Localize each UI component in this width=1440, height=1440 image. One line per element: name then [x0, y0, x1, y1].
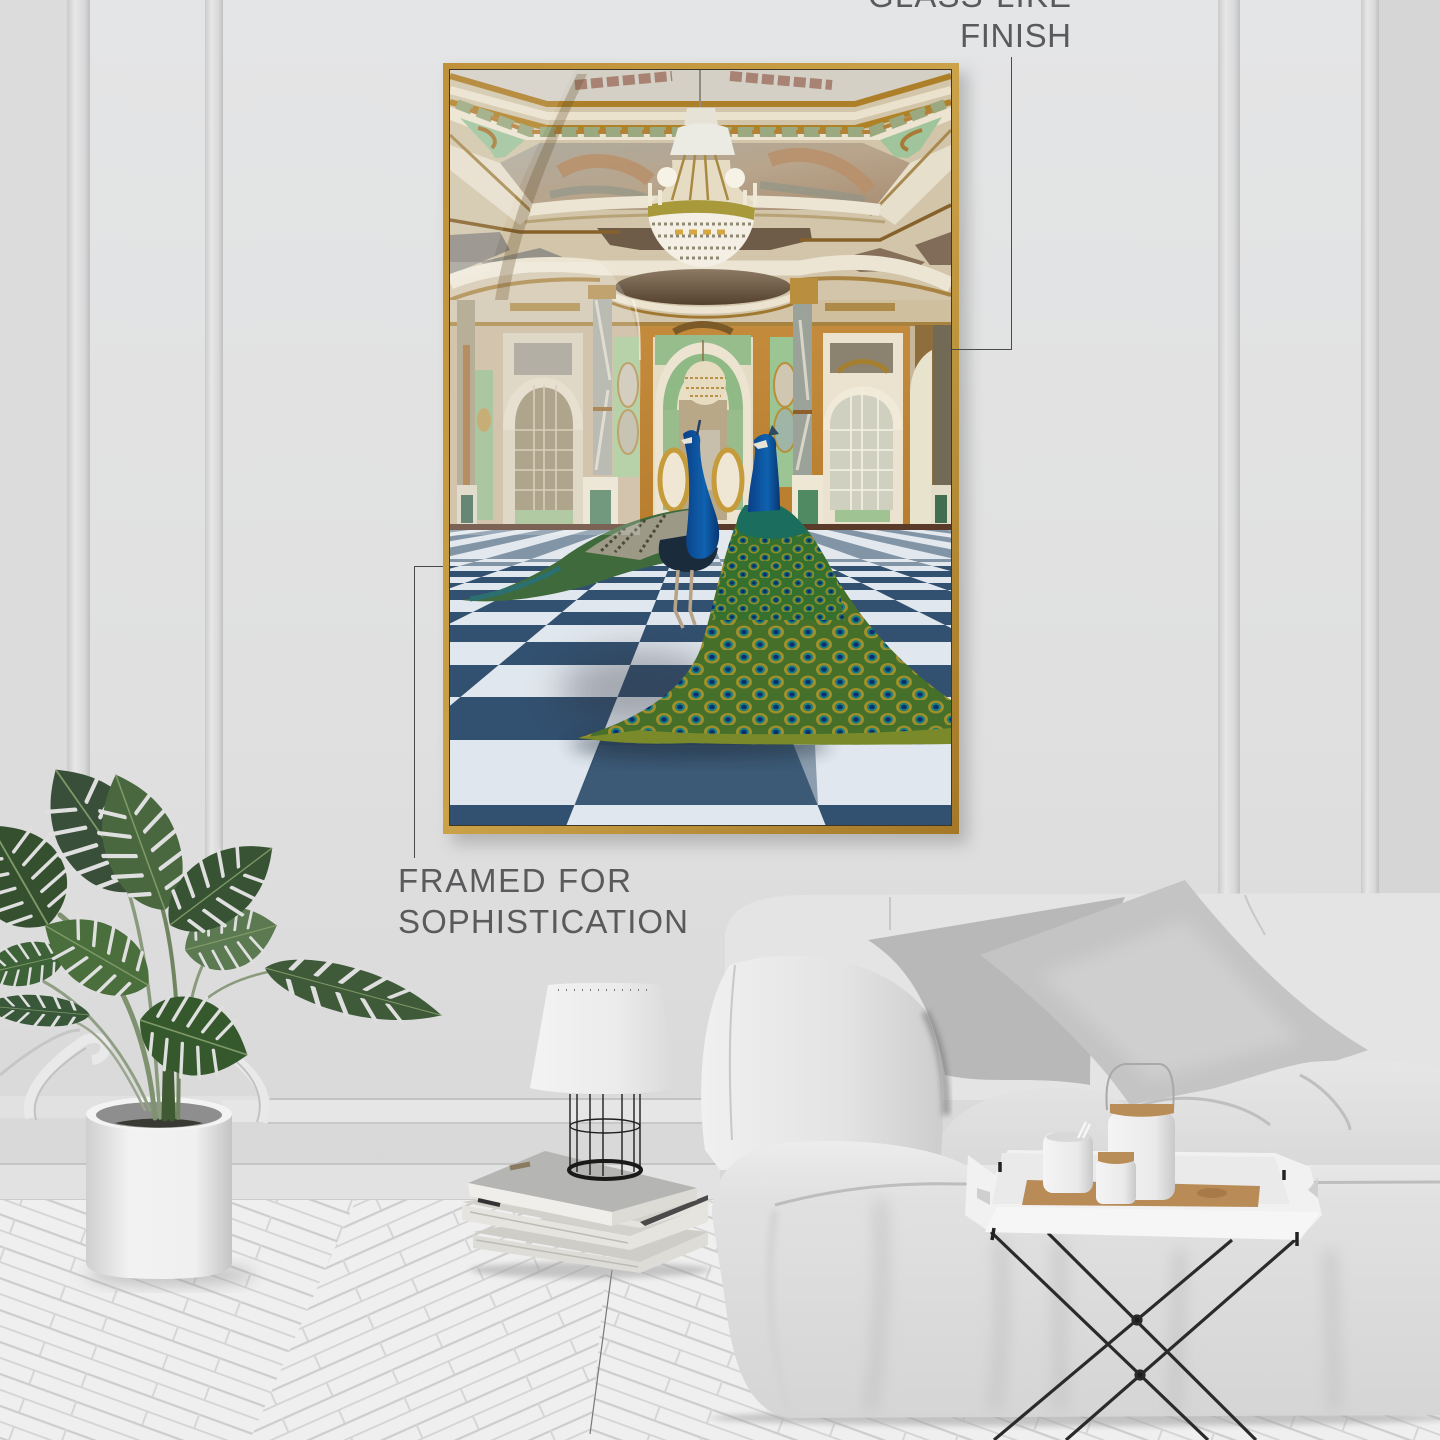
callout: framed for sophistication [398, 566, 688, 940]
painting: palace hall [450, 70, 951, 825]
stack of books [462, 1151, 710, 1278]
table lamp [530, 983, 678, 1179]
pot [86, 1097, 232, 1279]
left arm cushion [701, 955, 943, 1170]
painted ceiling [450, 70, 951, 322]
pillows [868, 880, 1368, 1105]
front cushion [712, 1141, 1440, 1418]
hall walls [450, 278, 951, 534]
ceramic cups and canisters [1043, 1104, 1175, 1204]
glass dome handle [1106, 1064, 1174, 1110]
seat cushions [930, 1060, 1440, 1300]
distant chandelier [684, 340, 726, 405]
callout: glass-like finish [868, 0, 1071, 350]
frame shadow [452, 72, 968, 844]
leaves [0, 743, 448, 1095]
wooden board [1022, 1180, 1260, 1207]
peacock left [462, 420, 719, 628]
plant pot shadow [85, 1265, 255, 1285]
glass reflection [450, 70, 641, 535]
peacock right with fanned tail [578, 425, 951, 745]
tray [965, 1150, 1322, 1238]
columns [457, 278, 951, 533]
sofa back [725, 893, 1440, 1100]
checkerboard marble floor [450, 530, 951, 825]
side table with tray [965, 1064, 1322, 1440]
potted monstera plant [0, 743, 448, 1285]
sofa [701, 880, 1440, 1426]
parquet floor [0, 1200, 1440, 1440]
crystal chandelier [648, 70, 755, 267]
callout: framed for sophistication: FRAMED FOR [398, 862, 631, 899]
callout: framed for sophistication: SOPHISTICATION [398, 903, 688, 940]
stems [15, 890, 290, 1118]
framed artwork: gold frame [443, 63, 959, 834]
table legs [991, 1232, 1295, 1440]
callout: glass-like finish: FINISH [960, 17, 1071, 54]
